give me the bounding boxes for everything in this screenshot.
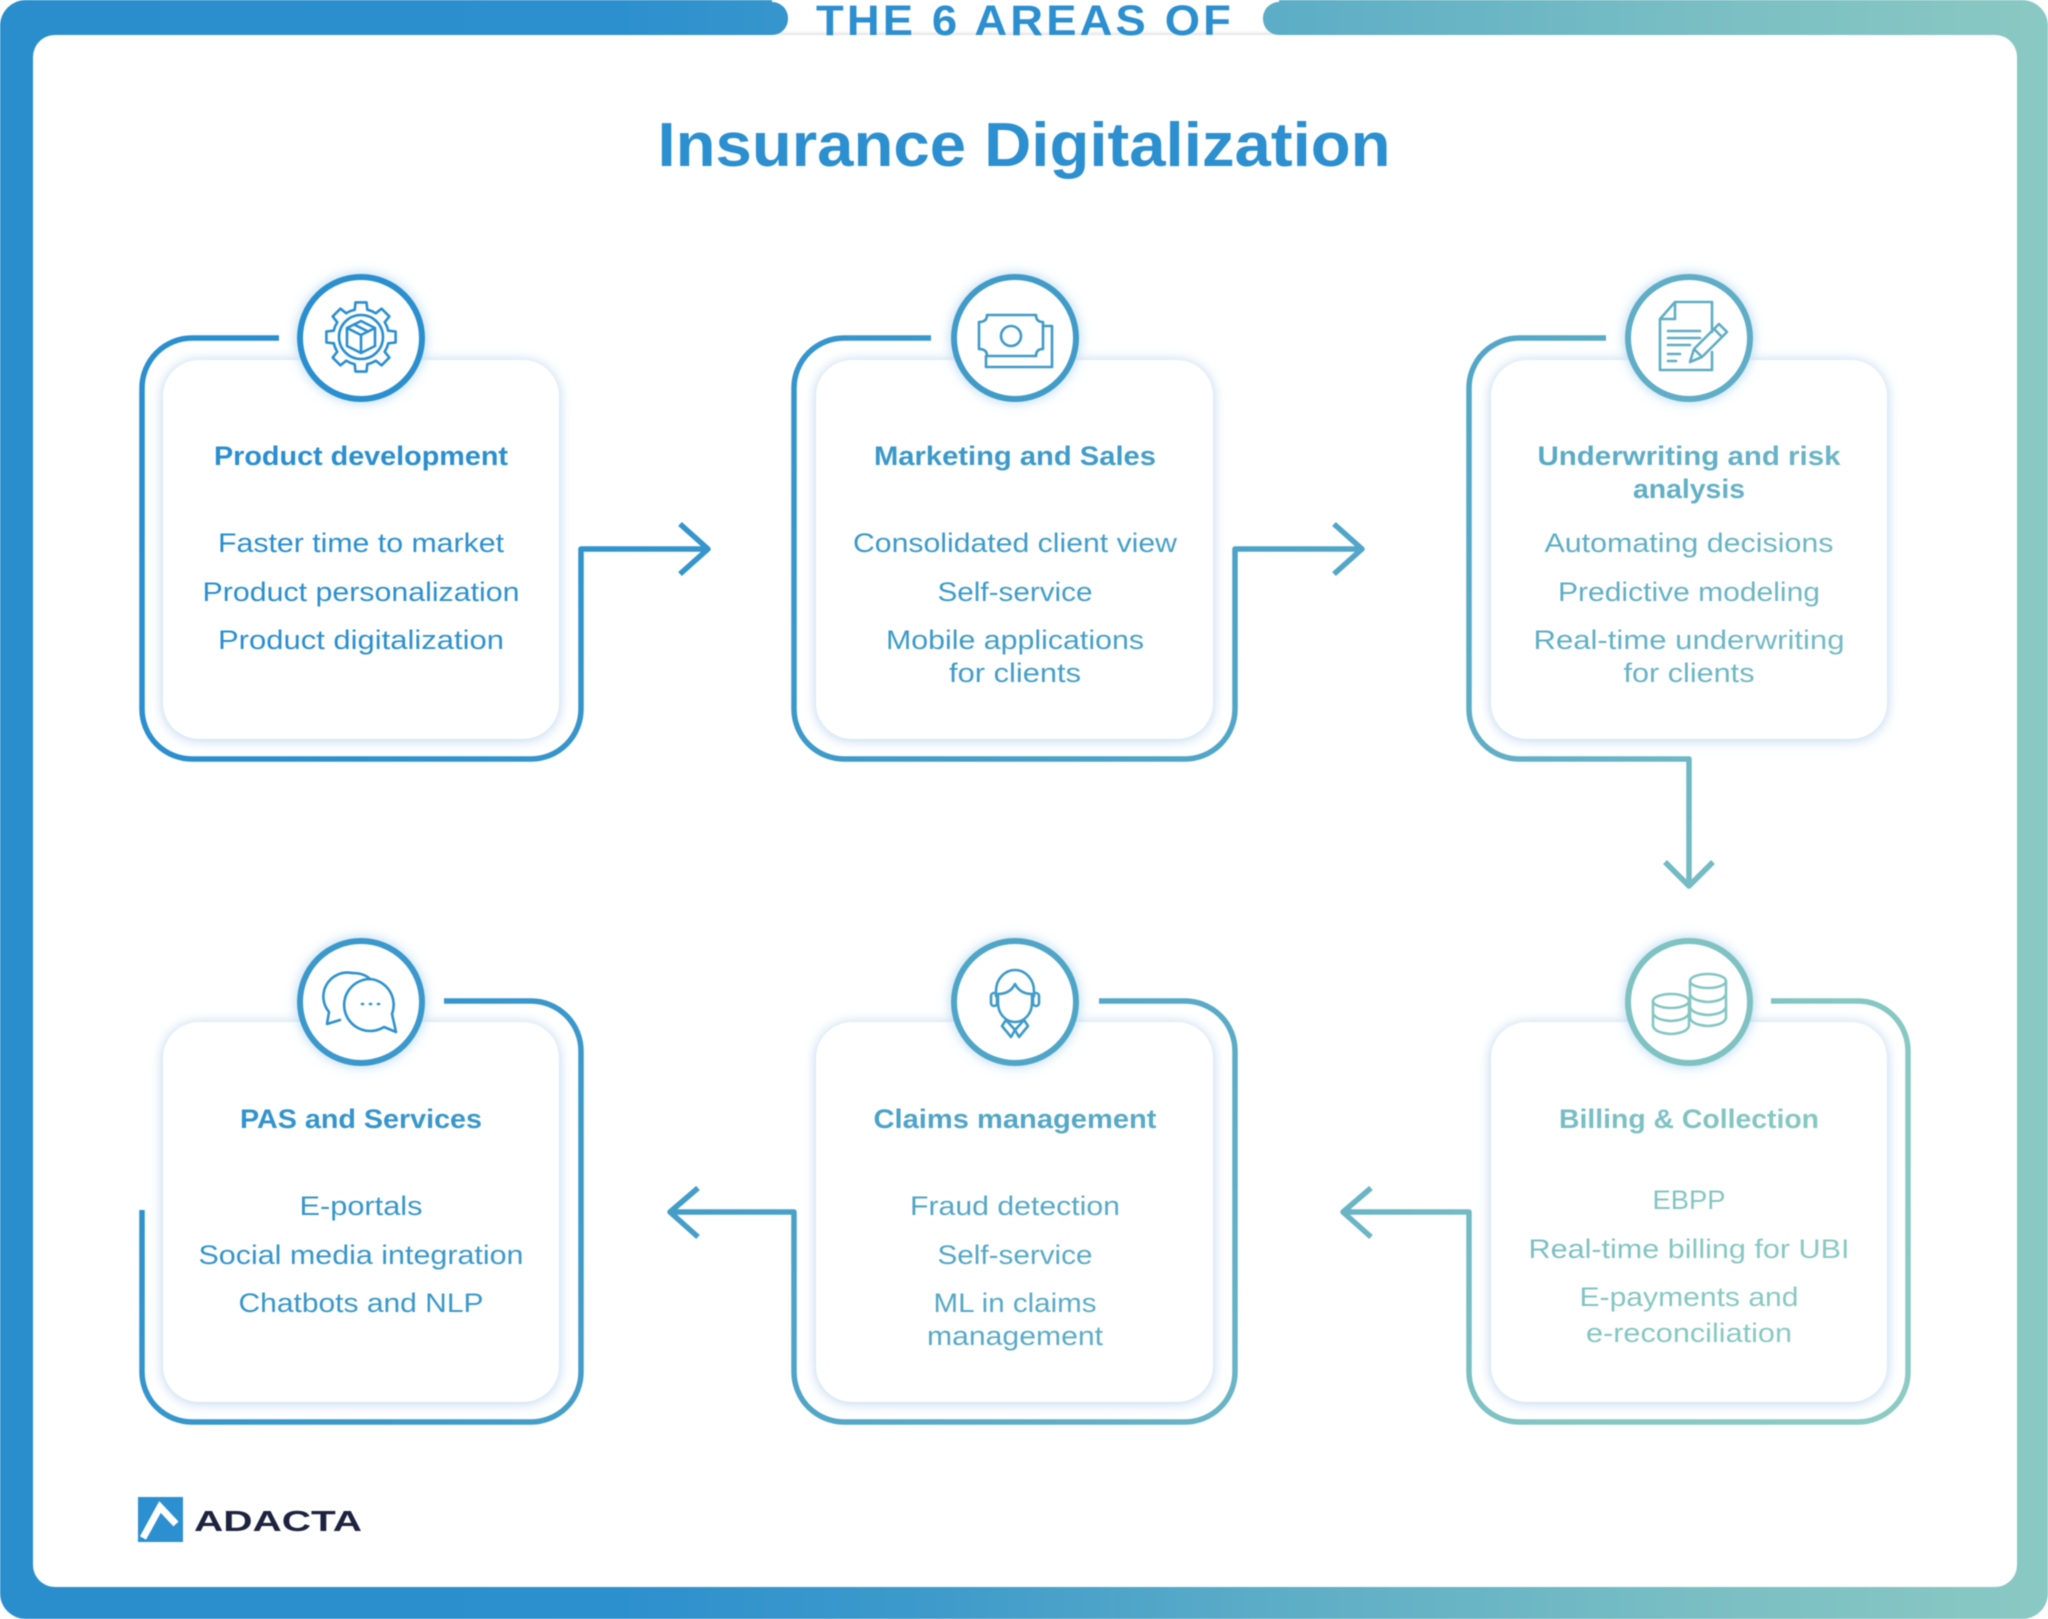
list: Automating decisions [1544, 528, 1834, 558]
list: Product personalization [202, 577, 520, 607]
panel: billing and collection [1343, 941, 1908, 1422]
connector and arrow to claims [1343, 1001, 1908, 1422]
list: for clients [1624, 658, 1754, 688]
list: Chatbots and NLP [238, 1288, 484, 1318]
list: for clients [949, 658, 1081, 688]
heading [1538, 441, 1842, 504]
list: Self-service [938, 577, 1092, 607]
heading: analysis [1633, 474, 1745, 504]
connector and arrow to underwriting [794, 338, 1362, 759]
panel: underwriting and risk analysis [1469, 277, 1887, 886]
list: Real-time underwriting [1534, 625, 1844, 655]
connector and arrow to pas [670, 1001, 1235, 1422]
panel: product development [142, 277, 708, 759]
list: Faster time to market [218, 528, 505, 558]
heading: Claims management [874, 1104, 1157, 1134]
list: Mobile applications [886, 625, 1144, 655]
list: Consolidated client view [853, 528, 1178, 558]
list: E-payments and [1580, 1282, 1798, 1312]
icon: document and pencil [1660, 302, 1727, 370]
list: Product digitalization [218, 625, 504, 655]
icon: chat bubbles [323, 973, 396, 1032]
list: Fraud detection [910, 1191, 1120, 1221]
icon: gear with box [326, 302, 396, 372]
list: ML in claims [934, 1288, 1096, 1318]
heading: Billing & Collection [1559, 1104, 1819, 1134]
heading: PAS and Services [240, 1104, 482, 1134]
list [910, 1191, 1120, 1351]
logo [138, 1497, 362, 1542]
list: e-reconciliation [1586, 1318, 1792, 1348]
heading: Underwriting and risk [1538, 441, 1842, 471]
connector and arrow to marketing [142, 338, 708, 759]
list [853, 528, 1178, 688]
list [1528, 1185, 1850, 1348]
list: E-portals [300, 1191, 422, 1221]
panel: marketing and sales [794, 277, 1362, 759]
list [1534, 528, 1844, 688]
title: Insurance Digitalization [658, 111, 1390, 180]
outline [142, 1001, 581, 1422]
list: Real-time billing for UBI [1528, 1234, 1850, 1264]
list: EBPP [1652, 1185, 1726, 1215]
icon: banknotes [979, 315, 1052, 367]
heading: Product development [214, 441, 508, 471]
connector and arrow to billing [1469, 338, 1713, 886]
list: Self-service [938, 1240, 1092, 1270]
icon: coin stacks [1653, 974, 1726, 1034]
list [202, 528, 520, 655]
logo: ADACTA [194, 1506, 362, 1538]
heading: Marketing and Sales [874, 441, 1156, 471]
list: Social media integration [198, 1240, 524, 1270]
list [198, 1191, 524, 1318]
list: management [927, 1321, 1104, 1351]
icon: support agent [991, 970, 1039, 1037]
panel: claims management [670, 941, 1235, 1422]
panel: pas and services [142, 941, 581, 1422]
list: Predictive modeling [1558, 577, 1820, 607]
